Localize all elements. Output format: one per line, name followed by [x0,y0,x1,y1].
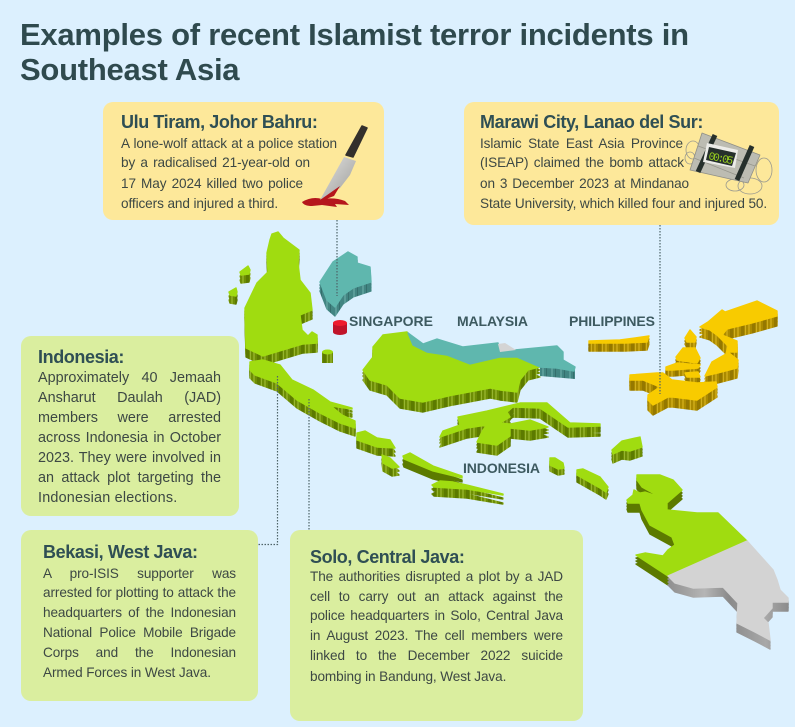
Sulawesi [440,403,600,455]
panel: Ulu Tiram, Johor Bahru: officers and injured a third. [121,196,278,211]
panel: Bekasi, West Java: arrested for plotting to attack the [43,585,236,600]
panel: Ulu Tiram, Johor Bahru: A lone-wolf attack at a police station [121,136,337,151]
Eastern Indonesian islands [550,437,642,499]
panel: Ulu Tiram, Johor Bahru [103,102,384,220]
Singapore marker [333,320,347,335]
panel: Marawi City, Lanao del Sur: State University, which killed four and injured 50. [480,196,767,211]
panel: Bekasi, West Java: A pro-ISIS supporter was [43,566,236,581]
leader line: Marawi City [659,225,661,394]
Borneo [363,332,575,412]
panel: Bekasi, West Java: headquarters of the Indonesian [43,605,236,620]
panel: Solo, Central Java: bombing in Bandung, West Java. [310,669,506,684]
panel: Ulu Tiram, Johor Bahru: by a radicalised 21-year-old on [121,155,310,170]
panel: Marawi City, Lanao del Sur: (ISEAP) claimed the bomb attack [480,155,684,170]
panel: Solo, Central Java [290,530,583,721]
panel: Indonesia: 2023. They were involved in [38,450,221,466]
panel: Indonesia: Approximately 40 Jemaah [38,370,221,386]
panel: Bekasi, West Java [21,530,258,701]
Indonesia: Java and Lesser Sunda islands [357,431,503,504]
panel: Indonesia: Ansharut Daulah (JAD) [38,390,221,406]
panel: Ulu Tiram, Johor Bahru: Ulu Tiram, Johor Bahru: [121,112,318,132]
panel: Bekasi, West Java: Bekasi, West Java: [43,542,198,562]
panel: Indonesia: an attack plot targeting the [38,470,221,486]
label: Indonesia: INDONESIA [463,460,540,476]
panel: Indonesia [21,336,239,516]
panel: Marawi City, Lanao del Sur: on 3 December 2023 at Mindanao [480,176,689,191]
leader line: Ulu Tiram [336,220,338,296]
panel: Indonesia: across Indonesia in October [38,430,221,446]
panel: Solo, Central Java: police headquarters in Solo, Central Java [310,608,563,623]
label: Singapore: SINGAPORE [349,313,433,329]
icon: time bomb: 00:05 [707,151,734,168]
Indonesia: Sumatra [229,232,355,436]
label: Philippines: PHILIPPINES [569,313,655,329]
icon: time bomb [684,132,772,194]
panel: Solo, Central Java: linked to the December 2022 suicide [310,648,563,663]
panel: Marawi City, Lanao del Sur [464,102,779,225]
panel: Indonesia: Indonesia: [38,347,124,367]
New Guinea [627,475,788,649]
panel: Bekasi, West Java: National Police Mobile Brigade [43,625,236,640]
icon: bloody knife [302,125,368,207]
label: Malaysia: MALAYSIA [457,313,528,329]
leader line: Solo [308,399,310,530]
leader line: Bekasi [258,376,278,544]
panel: Ulu Tiram, Johor Bahru: 17 May 2024 killed two police [121,176,303,191]
panel: Solo, Central Java: The authorities disrupted a plot by a JAD [310,569,563,584]
panel: Marawi City, Lanao del Sur: Marawi City, Lanao del Sur: [480,112,703,132]
panel: Bekasi, West Java: Corps and the Indonesian [43,645,236,660]
panel: Bekasi, West Java: Armed Forces in West Java. [43,665,211,680]
panel: Marawi City, Lanao del Sur: Islamic State East Asia Province [480,136,683,151]
panel: Solo, Central Java: cell to carry out an attack against the [310,589,563,604]
title: Examples of recent Islamist terror incidents in [20,17,689,52]
title: Southeast Asia [20,52,239,87]
title [20,17,689,87]
panel: Solo, Central Java: Solo, Central Java: [310,547,464,567]
panel: Indonesia: Indonesian elections. [38,490,177,506]
Peninsular Malaysia [320,252,371,316]
Philippines [589,301,777,415]
panel: Solo, Central Java: in August 2023. The cell members were [310,628,563,643]
panel: Indonesia: members were arrested [38,410,221,426]
